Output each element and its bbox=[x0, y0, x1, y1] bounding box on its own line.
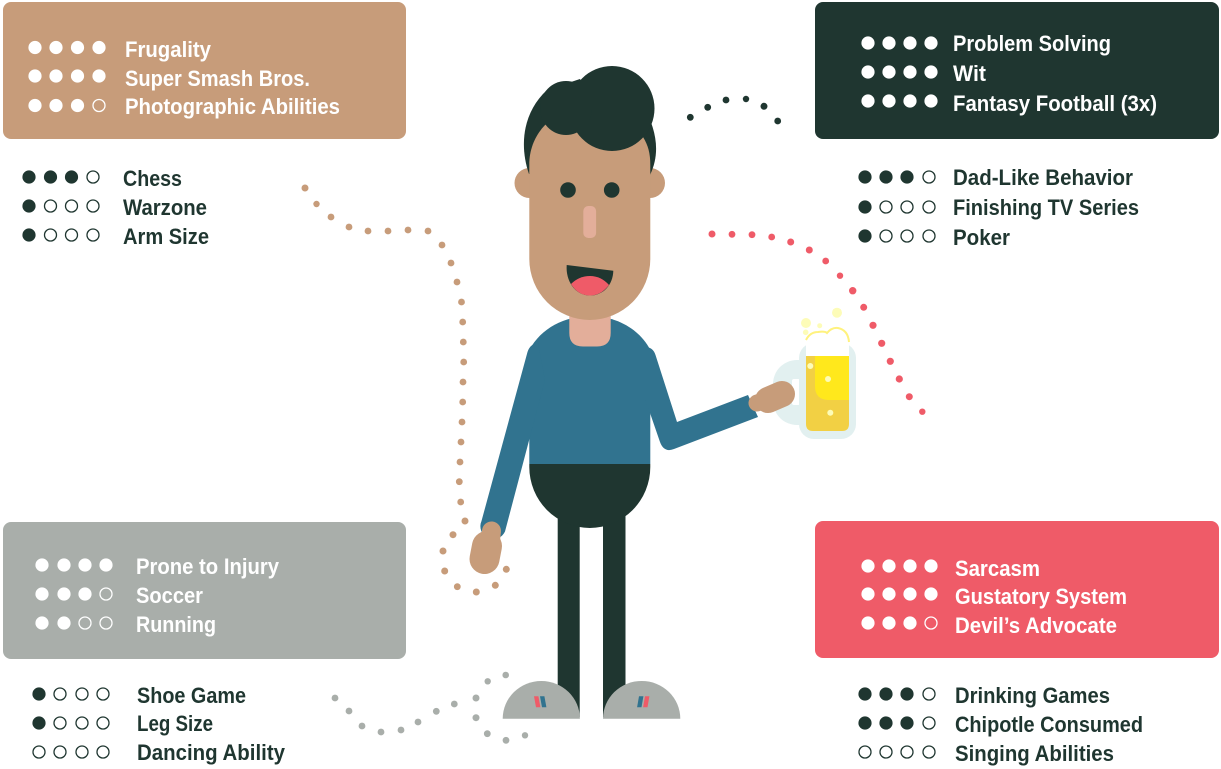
rating row: Prone to Injury: Prone to Injury bbox=[136, 554, 280, 579]
rating row: Poker bbox=[858, 225, 1010, 250]
rating row: Prone to Injury bbox=[35, 554, 280, 579]
sweater torso bbox=[529, 316, 650, 464]
rating row: Devil's Advocate: Devil’s Advocate bbox=[955, 613, 1117, 638]
rating row: Chess bbox=[22, 166, 182, 191]
rating row: Warzone: Warzone bbox=[123, 195, 207, 220]
rating row: Warzone bbox=[22, 195, 207, 220]
rating row: Wit: Wit bbox=[953, 61, 987, 86]
rating row: Running: Running bbox=[136, 612, 216, 637]
rating row: Dad-Like Behavior: Dad-Like Behavior bbox=[953, 165, 1133, 190]
dotted trail: red, head to beer bbox=[708, 230, 926, 415]
rating row: Arm Size: Arm Size bbox=[123, 224, 209, 249]
rating row: Dancing Ability: Dancing Ability bbox=[137, 740, 286, 765]
rating row: Fantasy Football bbox=[861, 91, 1157, 116]
rating row: Shoe Game: Shoe Game bbox=[137, 683, 246, 708]
face bbox=[529, 124, 650, 320]
panel: bottom-left grey strengths bbox=[3, 522, 406, 659]
beer mug bbox=[773, 308, 856, 439]
rating row: Dad-Like Behavior bbox=[858, 165, 1133, 190]
rating row: Finishing TV Series: Finishing TV Series bbox=[953, 195, 1139, 220]
panel: top-right dark strengths bbox=[815, 2, 1219, 139]
ears bbox=[514, 168, 665, 198]
rating row: Problem Solving: Problem Solving bbox=[953, 31, 1111, 56]
list: top-left lesser skills bbox=[22, 166, 209, 249]
rating row: Problem Solving bbox=[861, 31, 1111, 56]
rating row: Chess: Chess bbox=[123, 166, 182, 191]
rating row: Drinking Games: Drinking Games bbox=[955, 683, 1110, 708]
right hand bbox=[757, 394, 782, 403]
rating row: Chipotle Consumed: Chipotle Consumed bbox=[955, 712, 1143, 737]
dotted trail: grey, bottom-left list to shoes bbox=[332, 672, 528, 744]
rating row: Finishing TV Series bbox=[858, 195, 1139, 220]
rating row: Running bbox=[35, 612, 216, 637]
rating row: Wit bbox=[861, 61, 987, 86]
rating row: Poker: Poker bbox=[953, 225, 1010, 250]
legs bbox=[558, 500, 626, 717]
rating row: Singing Abilities bbox=[859, 741, 1114, 766]
shoes bbox=[503, 681, 680, 719]
rating row: Devil's Advocate bbox=[861, 613, 1117, 638]
rating row: Super Smash Bros. bbox=[28, 66, 310, 91]
list: top-right lesser skills bbox=[858, 165, 1139, 250]
rating row: Drinking Games bbox=[858, 683, 1110, 708]
rating row: Gustatory System: Gustatory System bbox=[955, 584, 1127, 609]
left arm bbox=[480, 343, 545, 539]
dotted trail: dark arc near head bbox=[687, 96, 781, 124]
character bbox=[480, 66, 856, 719]
rating row: Fantasy Football: Fantasy Football (3x) bbox=[953, 91, 1157, 116]
mouth bbox=[567, 265, 613, 296]
rating row: Photographic Abilities bbox=[28, 94, 340, 119]
list: bottom-left lesser skills bbox=[32, 683, 286, 765]
panel: top-left tan strengths bbox=[3, 2, 406, 139]
rating row: Leg Size bbox=[32, 711, 213, 736]
rating row: Chipotle Consumed bbox=[858, 712, 1143, 737]
neck bbox=[569, 300, 611, 346]
dotted trail: tan, top-left panel to left hand bbox=[302, 184, 510, 596]
rating row: Dancing Ability bbox=[33, 740, 286, 765]
rating row: Photographic Abilities: Photographic Abilities bbox=[125, 94, 340, 119]
rating row: Arm Size bbox=[22, 224, 209, 249]
list: bottom-right lesser skills bbox=[858, 683, 1143, 766]
rating row: Soccer: Soccer bbox=[136, 583, 203, 608]
shorts bbox=[529, 464, 650, 528]
rating row: Frugality: Frugality bbox=[125, 37, 212, 62]
rating row: Gustatory System bbox=[861, 584, 1127, 609]
right arm bbox=[645, 347, 758, 450]
hair quiff bbox=[540, 66, 654, 151]
nose bbox=[583, 206, 596, 238]
rating row: Frugality bbox=[28, 37, 212, 62]
rating row: Soccer bbox=[35, 583, 203, 608]
left hand bbox=[484, 531, 492, 559]
rating row: Singing Abilities: Singing Abilities bbox=[955, 741, 1114, 766]
rating row: Leg Size: Leg Size bbox=[137, 711, 213, 736]
rating row: Sarcasm bbox=[861, 556, 1040, 581]
rating row: Sarcasm: Sarcasm bbox=[955, 556, 1040, 581]
back hair bbox=[524, 80, 656, 175]
rating row: Super Smash Bros.: Super Smash Bros. bbox=[125, 66, 310, 91]
rating row: Shoe Game bbox=[32, 683, 246, 708]
panel: bottom-right red strengths bbox=[815, 521, 1219, 658]
eyes bbox=[560, 182, 620, 198]
